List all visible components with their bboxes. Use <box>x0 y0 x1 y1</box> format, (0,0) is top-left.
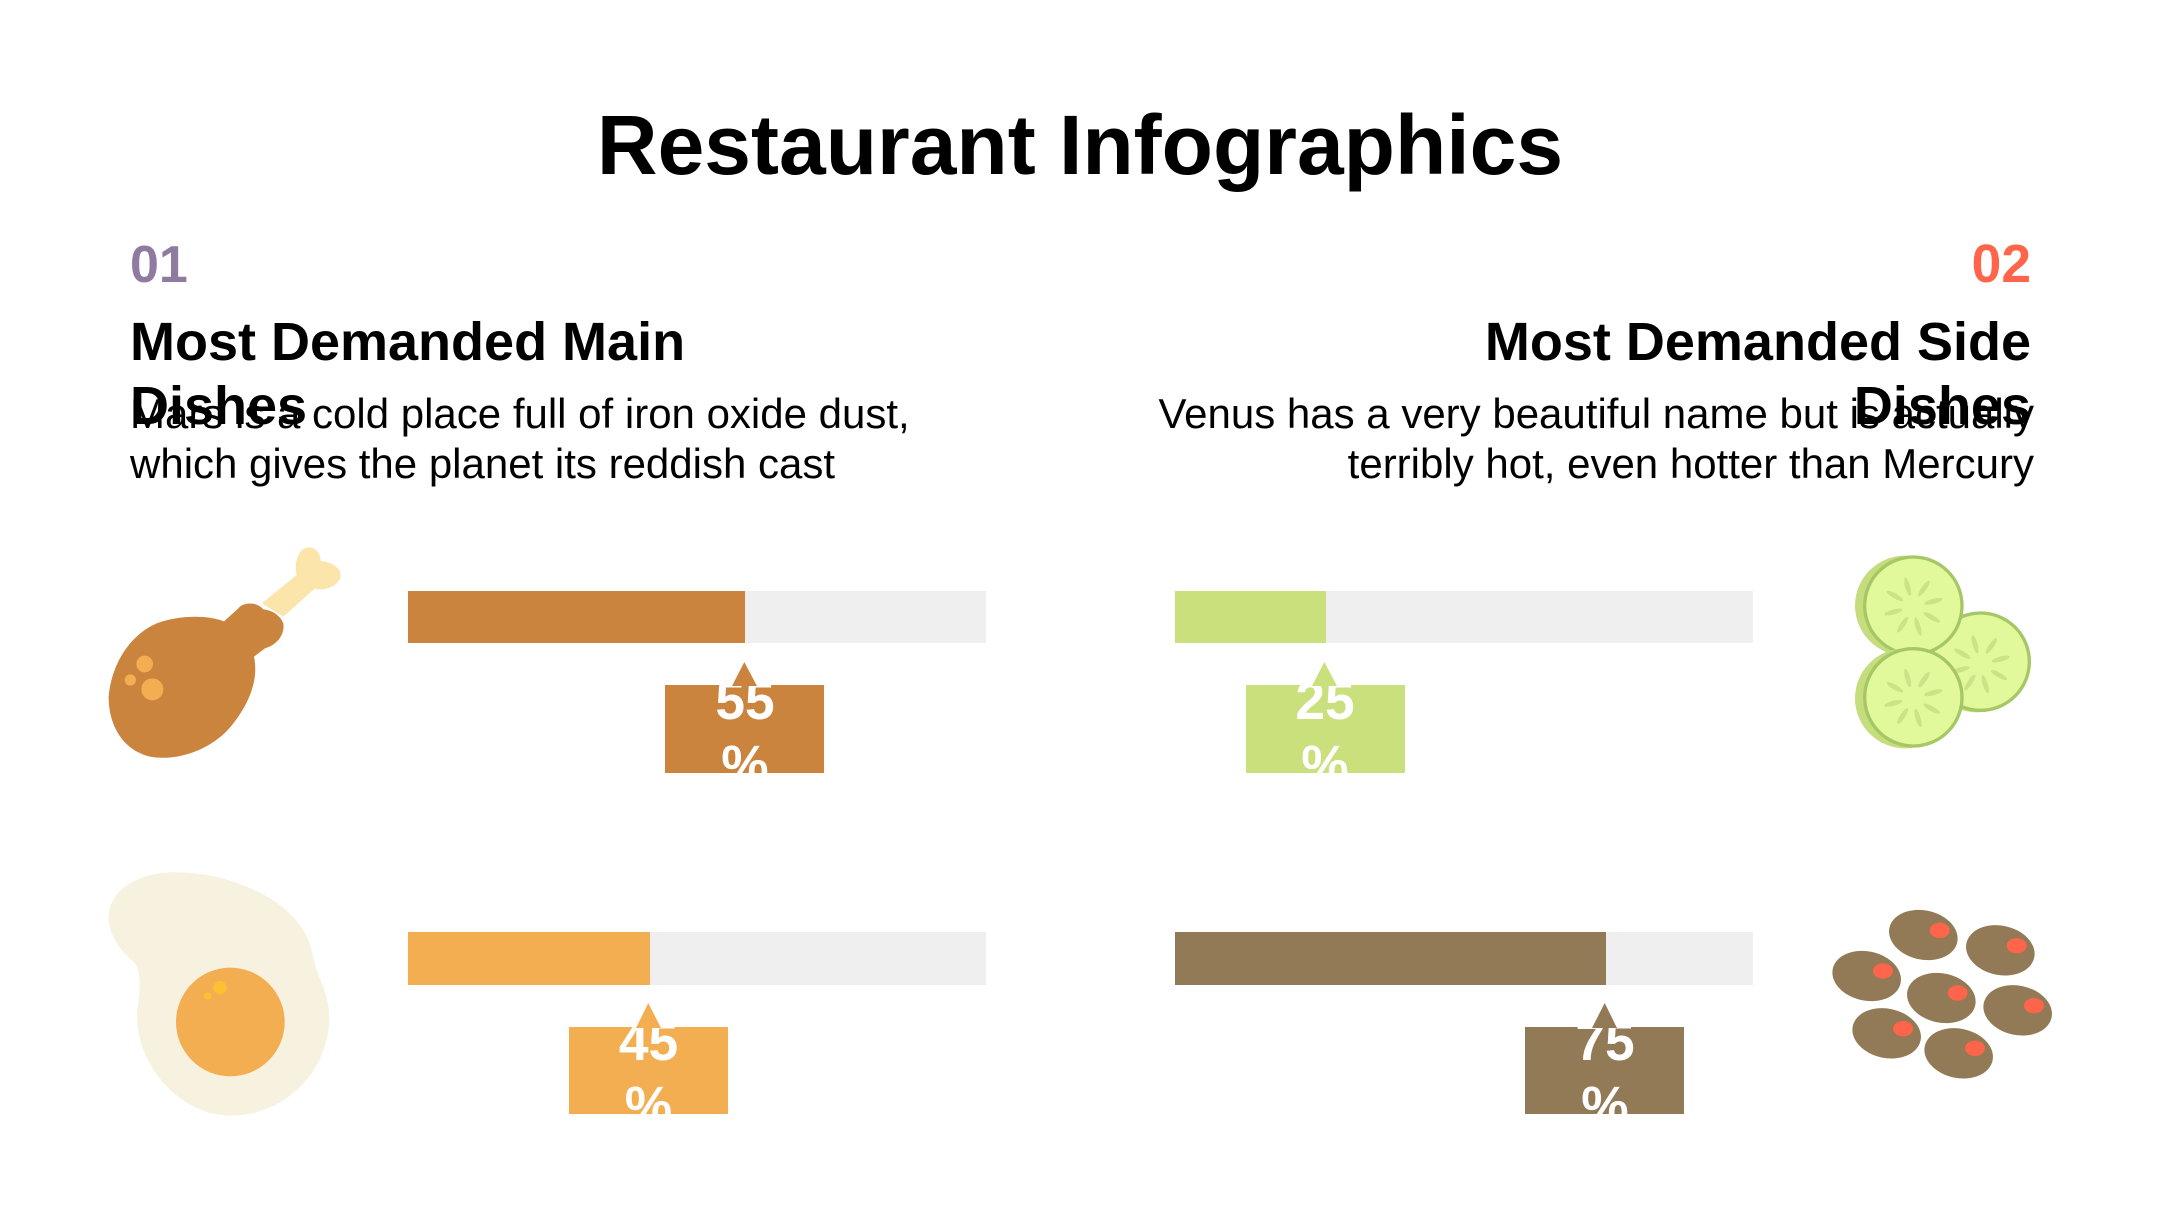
callout: 45% <box>569 1003 728 1136</box>
callout: 55% <box>665 662 824 795</box>
heading: main dishes: Dishes <box>130 376 307 436</box>
callout: 45%: % <box>625 1077 672 1136</box>
icon: fried egg <box>108 872 329 1116</box>
icon: olives <box>1828 904 2057 1085</box>
callout: 75%: 75 <box>1575 1013 1635 1072</box>
callout: 55%: % <box>721 736 769 795</box>
bar chart: olives 75% <box>1175 932 1753 1136</box>
number 02: 02 <box>1972 235 2031 294</box>
heading: main dishes: Most Demanded Main <box>130 312 685 372</box>
heading: side dishes: Dishes <box>1854 376 2031 436</box>
number 01: 01 <box>130 236 188 294</box>
bar chart: egg 45% <box>408 932 986 1136</box>
panel: main dishes header <box>129 236 910 487</box>
callout: 55%: 55 <box>715 672 775 731</box>
bar chart: chicken 55% <box>408 591 986 795</box>
panel: side dishes header <box>1158 235 2034 487</box>
bar chart: cucumber 25% <box>1175 591 1753 795</box>
callout: 45%: 45 <box>619 1013 678 1072</box>
icon: cucumber slices <box>1855 556 2029 748</box>
callout: 25%: % <box>1301 736 1349 795</box>
description: side dishes: terribly hot, even hotter than Mercury <box>1348 440 2034 487</box>
description: main dishes: Mars is a cold place full of iron oxide dust, <box>130 390 910 437</box>
heading: side dishes: Most Demanded Side <box>1485 312 2031 372</box>
description: main dishes: which gives the planet its reddish cast <box>129 440 835 487</box>
callout: 75% <box>1525 1003 1684 1136</box>
callout: 25% <box>1246 662 1405 795</box>
title: Restaurant Infographics <box>597 98 1563 192</box>
callout: 25%: 25 <box>1295 672 1355 731</box>
description: side dishes: Venus has a very beautiful name but is actually <box>1158 390 2034 437</box>
icon: chicken leg <box>109 547 341 758</box>
callout: 75%: % <box>1581 1077 1629 1136</box>
